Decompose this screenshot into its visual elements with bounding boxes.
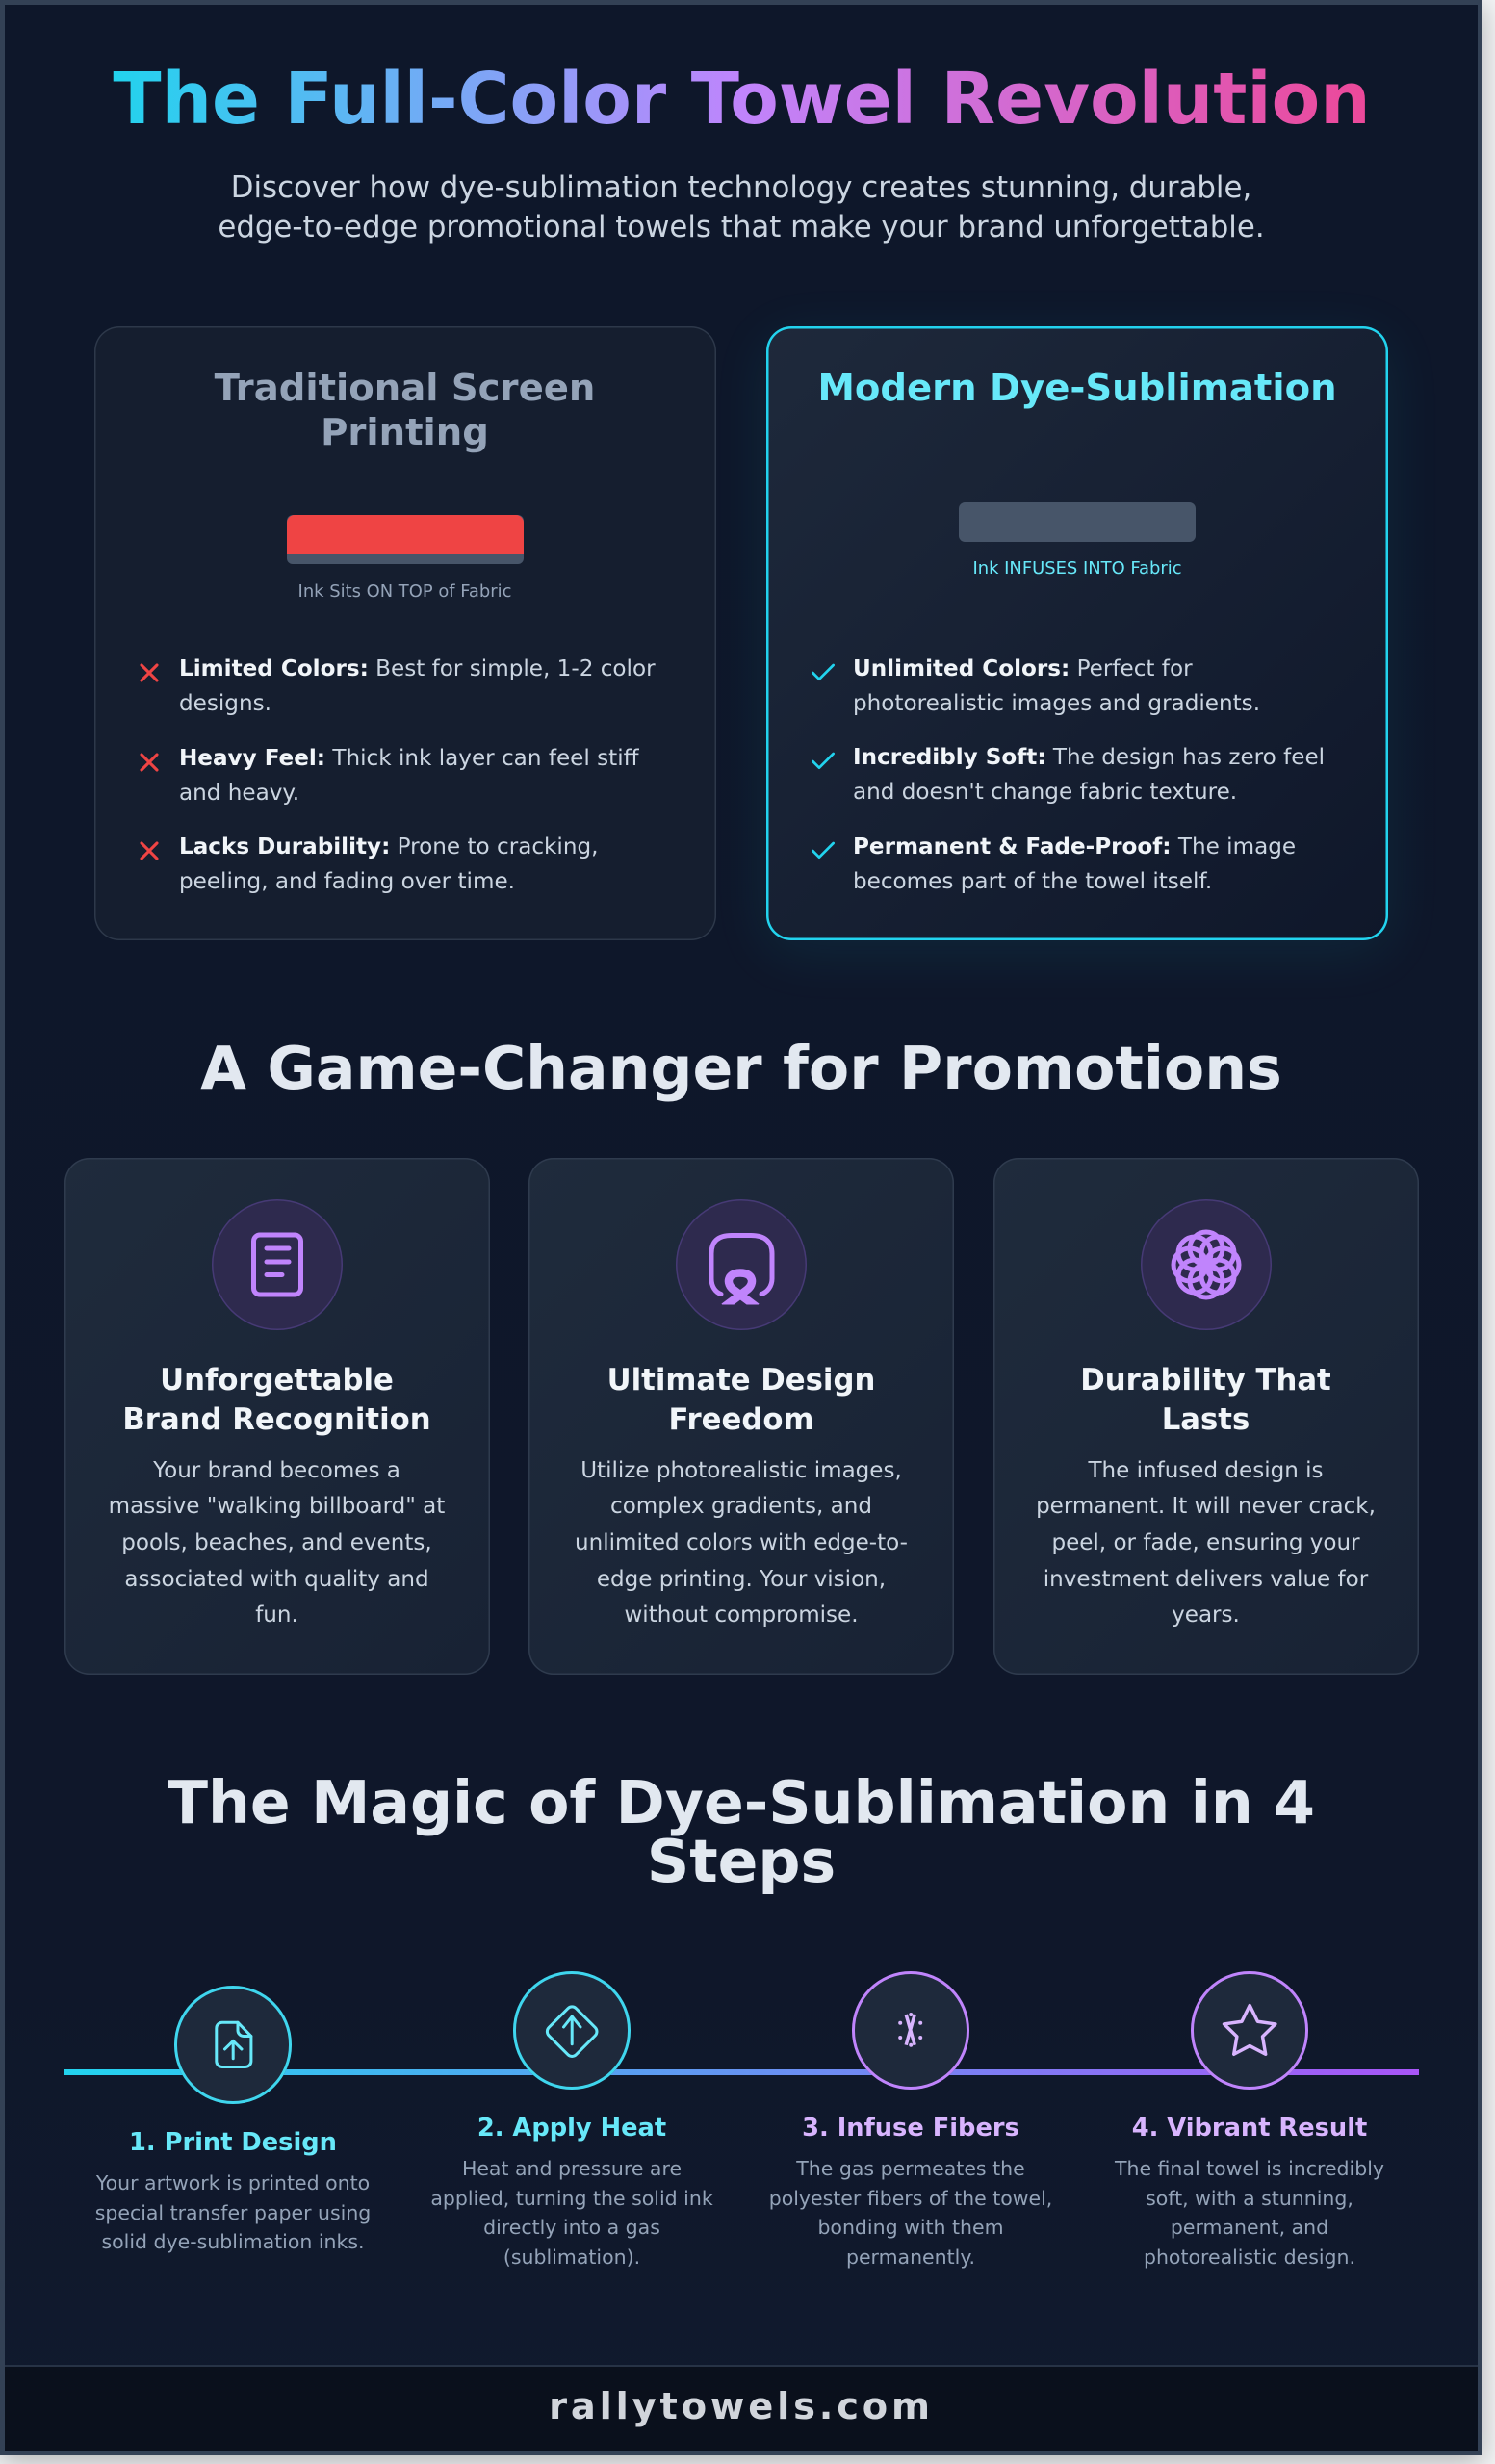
footer url: rallytowels.com [549, 2385, 934, 2428]
card text: unlimited colors with edge-to- [575, 1530, 908, 1555]
text: becomes part of the towel itself. [853, 869, 1212, 894]
step text: (sublimation). [503, 2246, 640, 2269]
step text: permanent, and [1171, 2216, 1328, 2239]
step title: 3. Infuse Fibers [802, 2114, 1019, 2143]
heading: traditional: Printing [321, 410, 489, 454]
card title: Ultimate Design [607, 1363, 875, 1398]
step text: applied, turning the solid ink [430, 2187, 713, 2210]
text: Lacks Durability: Prone to cracking, [179, 834, 598, 860]
text [853, 834, 1296, 894]
panel: brand recognition [64, 1158, 489, 1675]
text: Incredibly Soft: The design has zero feel [853, 745, 1325, 770]
card title [607, 1363, 875, 1437]
diagram: fabric with infused ink [959, 502, 1196, 542]
timeline line [64, 2069, 1419, 2075]
step text [95, 2171, 371, 2253]
item: permanent [811, 834, 1296, 894]
card text: fun. [255, 1603, 298, 1628]
text [853, 656, 1260, 716]
text: Heavy Feel: Thick ink layer can feel stiff [179, 746, 639, 771]
caption: ink on top: Ink Sits ON TOP of Fabric [298, 581, 511, 602]
card title [1080, 1363, 1331, 1437]
step text [769, 2157, 1052, 2269]
card text: Utilize photorealistic images, [580, 1458, 902, 1483]
icon: fibers [852, 1971, 969, 2090]
text [179, 656, 656, 716]
step title: 4. Vibrant Result [1132, 2114, 1367, 2143]
card text: pools, beaches, and events, [121, 1530, 432, 1555]
footer [5, 2365, 1478, 2451]
item: heavy feel [140, 746, 639, 806]
heading: traditional: Traditional Screen [215, 366, 595, 410]
card text: edge printing. Your vision, [597, 1567, 886, 1592]
icon: cross [140, 663, 159, 682]
step 2 [430, 1971, 713, 2269]
heading: modern: Modern Dye-Sublimation [817, 366, 1337, 410]
text: Limited Colors: Best for simple, 1-2 color [179, 656, 656, 681]
step text: soft, with a stunning, [1146, 2187, 1353, 2210]
card text: permanent. It will never crack, [1036, 1494, 1376, 1519]
heading: four steps [168, 1767, 1315, 1896]
list: drawbacks [140, 656, 656, 894]
subtitle: edge-to-edge promotional towels that make your brand unforgettable. [218, 210, 1265, 244]
heading: four steps: Steps [647, 1827, 836, 1896]
text: photorealistic images and gradients. [853, 691, 1260, 716]
step 4 [1115, 1971, 1384, 2269]
step text: photorealistic design. [1144, 2246, 1355, 2269]
card title [122, 1363, 431, 1437]
card title: Freedom [669, 1402, 813, 1437]
panel: design freedom [528, 1158, 954, 1675]
item: lacks durability [140, 834, 598, 894]
text: Permanent & Fade-Proof: The image [853, 834, 1296, 860]
icon: cross [140, 841, 159, 860]
step text: bonding with them [817, 2216, 1004, 2239]
item: incredibly soft [811, 745, 1325, 805]
icon: document [212, 1199, 343, 1330]
step text: Heat and pressure are [462, 2157, 682, 2180]
heading: four steps: The Magic of Dye-Sublimation in 4 [168, 1767, 1315, 1836]
subtitle [218, 169, 1265, 244]
text: designs. [179, 691, 271, 716]
card title: Durability That [1080, 1363, 1331, 1398]
item: unlimited colors [811, 656, 1260, 716]
step text [430, 2157, 713, 2269]
caption: ink infuses: Ink INFUSES INTO Fabric [972, 558, 1182, 578]
card text [109, 1458, 445, 1628]
icon: star [1191, 1971, 1308, 2090]
card text: The infused design is [1088, 1458, 1324, 1483]
card text: without compromise. [624, 1603, 859, 1628]
text: Unlimited Colors: Perfect for [853, 656, 1193, 681]
step title: 2. Apply Heat [477, 2114, 666, 2143]
icon: check [811, 753, 836, 770]
step 3 [769, 1971, 1052, 2269]
panel: durability [993, 1158, 1419, 1675]
step text: polyester fibers of the towel, [769, 2187, 1052, 2210]
text: peeling, and fading over time. [179, 869, 515, 894]
card text: investment delivers value for [1044, 1567, 1368, 1592]
card text [575, 1458, 908, 1628]
icon: heat arrow [513, 1971, 631, 2090]
step text: permanently. [846, 2246, 975, 2269]
icon: towel with ribbon [676, 1199, 807, 1330]
ink layer [287, 515, 524, 554]
step text: directly into a gas [483, 2216, 660, 2239]
heading: game changer: A Game-Changer for Promotions [200, 1034, 1282, 1103]
heading: traditional [214, 366, 595, 454]
text [853, 745, 1325, 805]
text [179, 834, 598, 894]
diagram: ink on top of fabric [287, 515, 524, 564]
step text: The gas permeates the [796, 2157, 1025, 2180]
step text: Your artwork is printed onto [96, 2171, 370, 2194]
card text: years. [1172, 1603, 1240, 1628]
step text: special transfer paper using [95, 2201, 371, 2224]
card text: massive "walking billboard" at [109, 1494, 445, 1519]
text: and doesn't change fabric texture. [853, 780, 1237, 805]
text [179, 746, 639, 806]
icon: check [811, 664, 836, 681]
step text: The final towel is incredibly [1115, 2157, 1384, 2180]
list: benefits [811, 656, 1325, 894]
title: The Full-Color Towel Revolution [113, 59, 1371, 141]
subtitle: Discover how dye-sublimation technology creates stunning, durable, [231, 169, 1251, 204]
card text: peel, or fade, ensuring your [1051, 1530, 1360, 1555]
step text: solid dye-sublimation inks. [101, 2230, 365, 2253]
icon: check [811, 841, 836, 859]
step 1 [95, 1986, 371, 2253]
card text [1036, 1458, 1376, 1628]
icon: file upload [174, 1986, 292, 2104]
fabric layer [287, 515, 524, 564]
card title: Lasts [1162, 1402, 1250, 1437]
step text [1115, 2157, 1384, 2269]
step title: 1. Print Design [129, 2128, 337, 2157]
panel: traditional screen printing [94, 326, 716, 940]
card text: Your brand becomes a [153, 1458, 400, 1483]
card text: associated with quality and [124, 1567, 429, 1592]
panel: modern dye-sublimation [766, 326, 1388, 940]
card text: complex gradients, and [610, 1494, 872, 1519]
text: and heavy. [179, 781, 299, 806]
card title: Unforgettable [160, 1363, 394, 1398]
icon: cross [140, 753, 159, 772]
icon: rosette [1140, 1199, 1271, 1330]
card title: Brand Recognition [122, 1402, 431, 1437]
item: limited colors [140, 656, 656, 716]
